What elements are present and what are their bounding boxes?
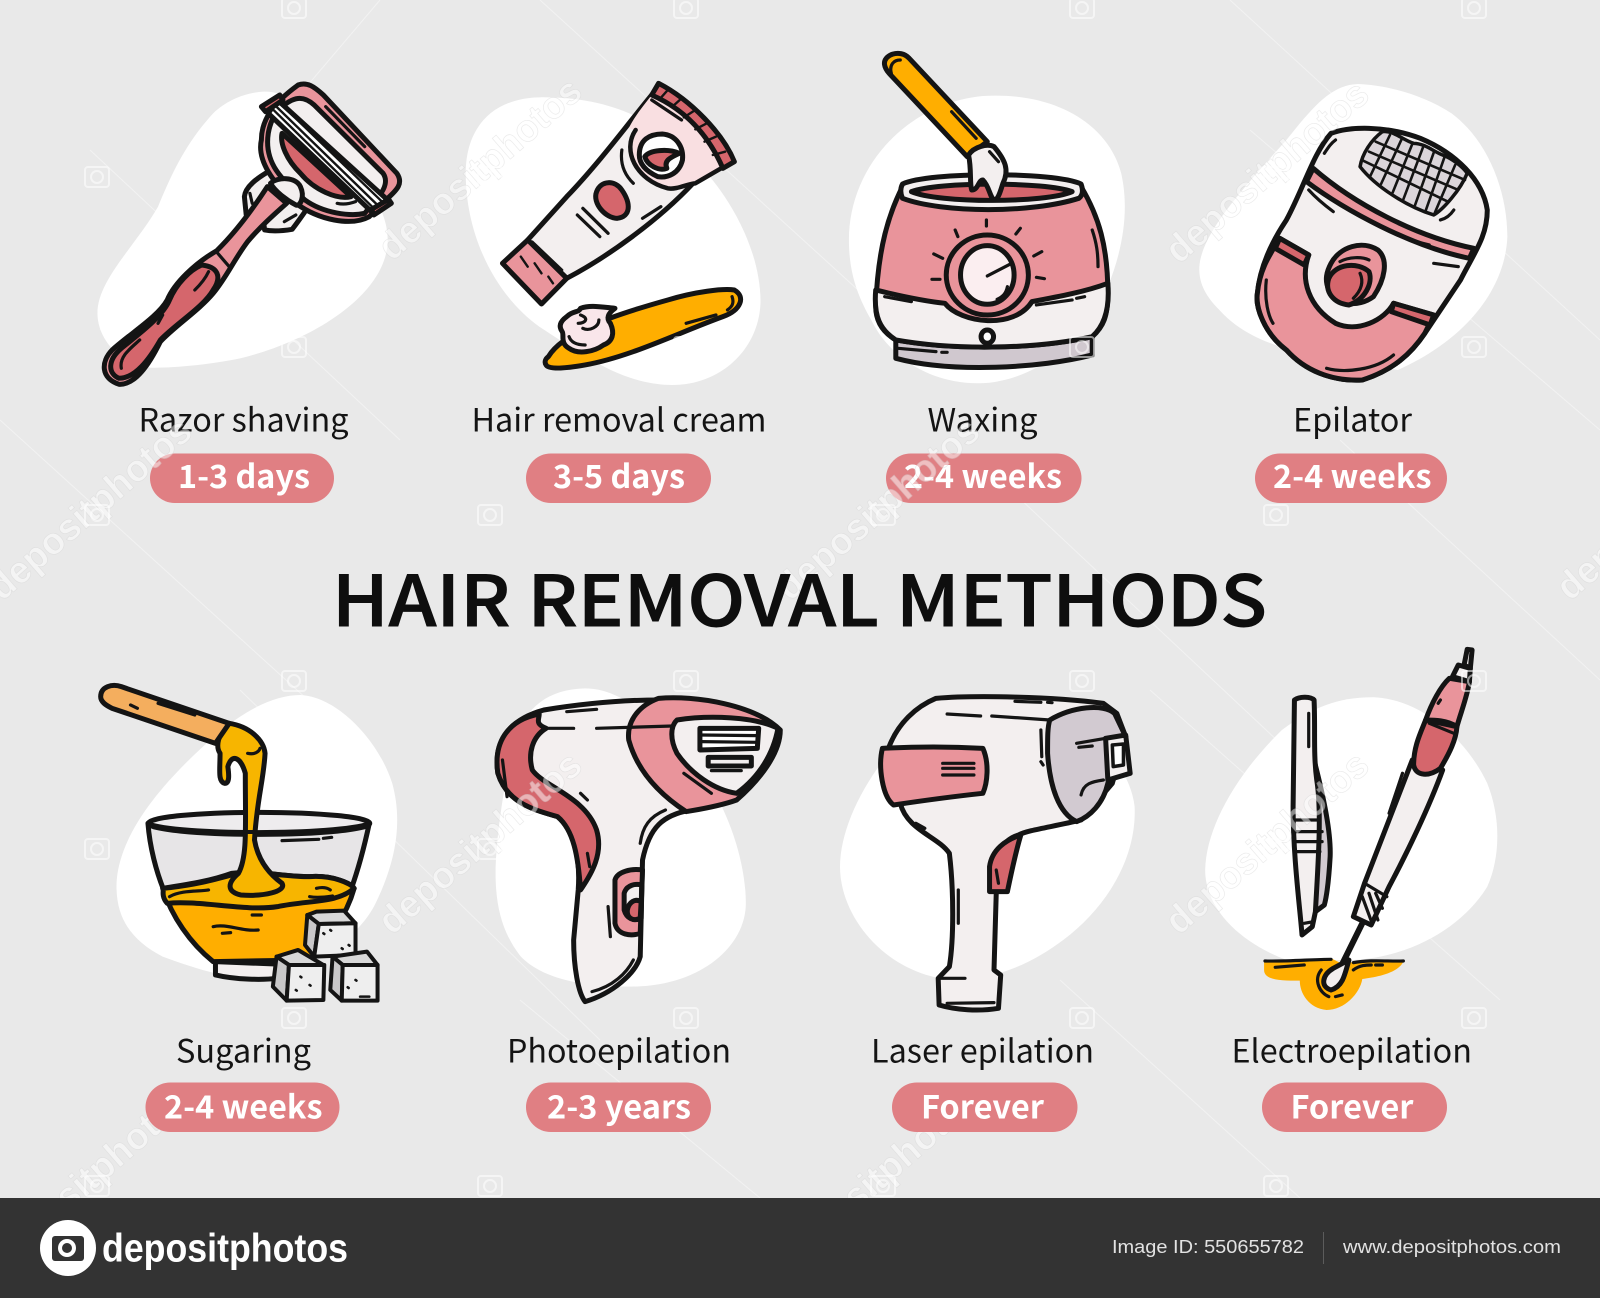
watermark overlay: depositphotos — [768, 410, 988, 609]
icon: laser device — [881, 697, 1130, 1010]
duration pills row one: 2-4 weeks — [904, 452, 1062, 498]
white blob: waxing — [849, 96, 1125, 383]
watermark overlay: depositphotos — [1157, 744, 1377, 943]
labels row two: Electroepilation — [1232, 1026, 1472, 1072]
labels row one: Razor shaving — [138, 396, 348, 442]
icon: razor — [104, 84, 400, 384]
icon: sugaring bowl — [101, 685, 378, 1001]
icon: epilator — [1257, 128, 1487, 380]
icon: electroepilation tweezers and pen — [1264, 649, 1472, 1010]
watermark overlay: depositphotos — [370, 70, 590, 269]
white blob: cream — [466, 97, 761, 385]
duration pills row two — [146, 1082, 1447, 1132]
labels row one: Epilator — [1293, 396, 1413, 442]
icon: wax heater — [875, 53, 1108, 367]
duration pills row one: 2-4 weeks — [1273, 452, 1432, 498]
icon: photoepilation device — [497, 698, 780, 1002]
watermark overlay: depositphotos — [1157, 73, 1377, 272]
white blob: razor — [97, 92, 388, 368]
duration pills row two: Forever — [1290, 1082, 1414, 1128]
footer image id: Image ID: 550655782 — [1112, 1237, 1304, 1257]
labels row two — [176, 1026, 1472, 1072]
white blob: laser — [840, 702, 1135, 980]
duration pills row one: 3-5 days — [553, 452, 685, 498]
icon: footer camera logo — [40, 1220, 96, 1276]
footer bar — [0, 1198, 1600, 1298]
white blob: sugaring — [117, 695, 397, 977]
white blob: photoepilation — [496, 688, 746, 987]
duration pills row two: Forever — [921, 1082, 1044, 1128]
watermark overlay: depositphotos — [768, 1078, 988, 1277]
duration pills row one — [150, 452, 1447, 503]
duration pills row two: 2-4 weeks — [164, 1082, 322, 1128]
labels row two: Photoepilation — [507, 1026, 731, 1072]
labels row one: Hair removal cream — [472, 396, 766, 442]
icon: cream tube and spatula — [502, 83, 741, 368]
duration pills row two: 2-3 years — [547, 1082, 691, 1128]
labels row one — [138, 396, 1413, 442]
title: HAIR REMOVAL METHODS — [332, 546, 1267, 647]
duration pills row one: 1-3 days — [178, 452, 310, 498]
labels row two: Laser epilation — [871, 1026, 1094, 1072]
watermark overlay: depositphotos — [370, 744, 590, 943]
labels row one: Waxing — [928, 396, 1038, 442]
footer website: www.depositphotos.com — [1342, 1237, 1561, 1257]
footer wordmark: depositphotos — [102, 1226, 348, 1270]
white blob: electroepilation — [1205, 697, 1497, 960]
labels row two: Sugaring — [176, 1026, 311, 1072]
white blob: epilator — [1199, 84, 1507, 370]
